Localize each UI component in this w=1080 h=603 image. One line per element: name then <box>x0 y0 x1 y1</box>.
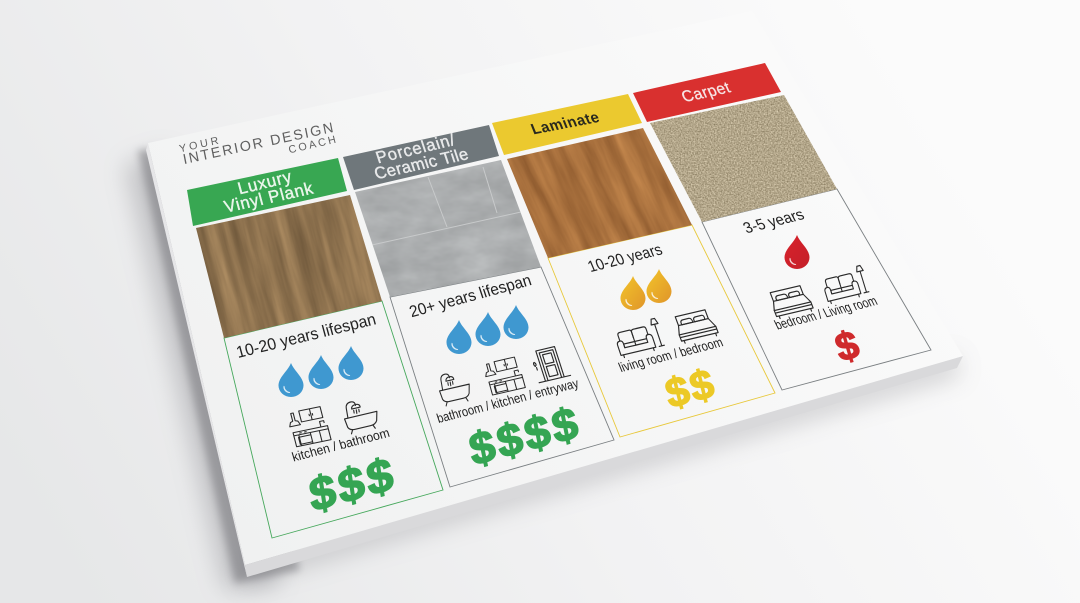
frame <box>224 301 443 538</box>
price: $$$ <box>306 446 399 522</box>
water drops <box>620 269 672 310</box>
logo: INTERIOR DESIGN <box>182 120 335 168</box>
carpet photo <box>650 95 837 222</box>
room icons <box>286 396 380 447</box>
lifespan: 20+ years lifespan <box>407 271 534 321</box>
header: Luxury <box>236 167 294 198</box>
room icons <box>437 345 571 407</box>
frame <box>702 189 931 390</box>
panel: carpet <box>633 63 931 390</box>
panel: porcelain / ceramic tile <box>340 125 614 487</box>
header: Carpet <box>679 79 734 106</box>
logo: COACH <box>287 134 337 156</box>
frame <box>390 267 614 487</box>
header <box>492 94 642 155</box>
room label: bedroom / Living room <box>772 293 880 332</box>
panel: laminate <box>492 94 776 438</box>
wood photo <box>507 128 692 258</box>
water drops <box>278 346 364 397</box>
price: $$ <box>661 360 720 417</box>
tile photo <box>355 160 541 297</box>
lifespan: 10-20 years <box>585 242 665 276</box>
header: Vinyl Plank <box>222 179 316 217</box>
header <box>633 63 781 122</box>
header: Porcelain/ <box>373 130 458 167</box>
room icons <box>768 265 871 319</box>
room label: kitchen / bathroom <box>290 425 391 464</box>
paper shadow <box>125 150 960 590</box>
panel: luxury vinyl plank <box>187 158 444 538</box>
water drops <box>446 305 528 354</box>
wood photo <box>196 195 382 338</box>
header <box>187 158 347 226</box>
header: Laminate <box>529 109 602 138</box>
header <box>343 125 499 190</box>
price: $ <box>830 322 864 371</box>
logo: YOUR <box>178 135 220 155</box>
header: Ceramic Tile <box>372 144 471 183</box>
room label: living room / bedroom <box>616 335 725 375</box>
lifespan: 10-20 years lifespan <box>234 309 378 362</box>
lifespan: 3-5 years <box>740 206 808 237</box>
water drop <box>784 235 810 269</box>
paper board <box>146 11 963 577</box>
price: $$$$ <box>465 396 585 476</box>
room label: bathroom / kitchen / entryway <box>435 375 581 426</box>
frame <box>548 225 775 437</box>
room icons <box>612 309 719 358</box>
